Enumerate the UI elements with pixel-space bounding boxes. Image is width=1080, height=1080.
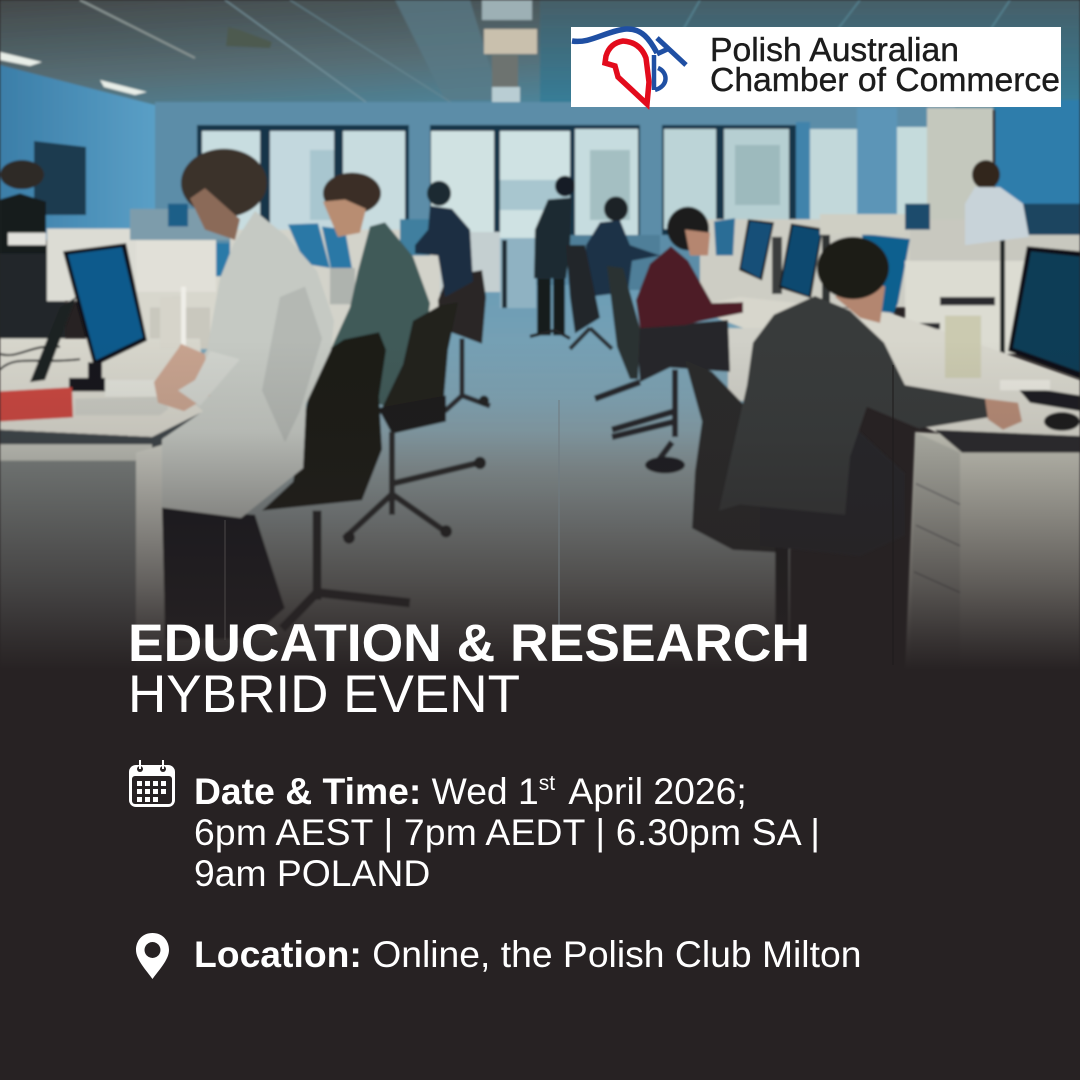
floor: [150, 285, 790, 670]
panel: logo: [571, 27, 1061, 107]
mid bench behind researchers: [230, 219, 440, 354]
logo wordmark: [710, 31, 1060, 98]
text block: date and time: Date & Time: Wed 1: [194, 770, 539, 812]
icon: calendar: [129, 760, 175, 807]
title: EDUCATION & RESEARCH: [128, 614, 810, 673]
left desk: [0, 297, 205, 670]
text block: date and time: [194, 770, 820, 894]
back wall: [155, 102, 955, 302]
left microscope: [136, 240, 216, 349]
right back bench: [700, 219, 915, 307]
left monitor: [63, 243, 147, 391]
windows: [197, 108, 993, 241]
right desk surface: [690, 297, 1080, 437]
text block: date and time: 9am POLAND: [194, 852, 430, 894]
title: [128, 614, 810, 724]
back chair 3: [438, 270, 490, 411]
photo: laboratory with researchers at desks: [0, 0, 1080, 670]
title: HYBRID EVENT: [128, 665, 520, 724]
maroon chair: [595, 266, 685, 473]
mug and papers: [945, 316, 1050, 390]
back desks in middle of room: [400, 232, 660, 308]
far left person: [0, 160, 46, 253]
scene corrected to reference height scale: [0, 149, 1080, 670]
row of monitors right: [714, 218, 910, 321]
dark gradient overlay: [0, 340, 1080, 670]
text block: date and time: st: [539, 772, 555, 795]
researcher in dark sweater: [719, 237, 1022, 556]
icon: eagle logo: [572, 29, 686, 104]
right monitor: [1008, 246, 1080, 431]
text block: date and time: 6pm AEST | 7pm AEDT | 6.30pm SA |: [194, 811, 820, 853]
researcher with white shirt: [965, 160, 1029, 245]
left bench equipment: [0, 204, 234, 359]
seated researcher in navy: [566, 196, 660, 349]
left wall doorway: [34, 141, 86, 215]
icon: location pin: [136, 933, 169, 979]
left wall: [0, 65, 155, 270]
researcher in green shirt: [323, 173, 430, 407]
text block: date and time: April 2026;: [560, 770, 747, 812]
red box: [0, 387, 73, 421]
logo wordmark: Polish Australian: [710, 31, 959, 68]
front chair 1: [262, 332, 410, 629]
right desk drawers: [728, 328, 1080, 670]
logo wordmark: Chamber of Commerce: [710, 61, 1060, 98]
text block: location: Location: Online, the Polish Club Milton: [194, 933, 861, 975]
researcher in white lab coat: [154, 149, 334, 639]
right bench equipment: [820, 204, 1080, 364]
back chair 2: [343, 302, 489, 544]
researcher in dark navy: [415, 181, 473, 297]
ceiling: [0, 0, 1080, 119]
standing researcher: [530, 176, 575, 339]
vertical seam lines: [225, 365, 893, 665]
front chair right: [685, 360, 789, 639]
keyboard and tablet: [75, 380, 168, 415]
researcher in maroon shirt: [636, 207, 743, 382]
right wall: [995, 100, 1080, 260]
